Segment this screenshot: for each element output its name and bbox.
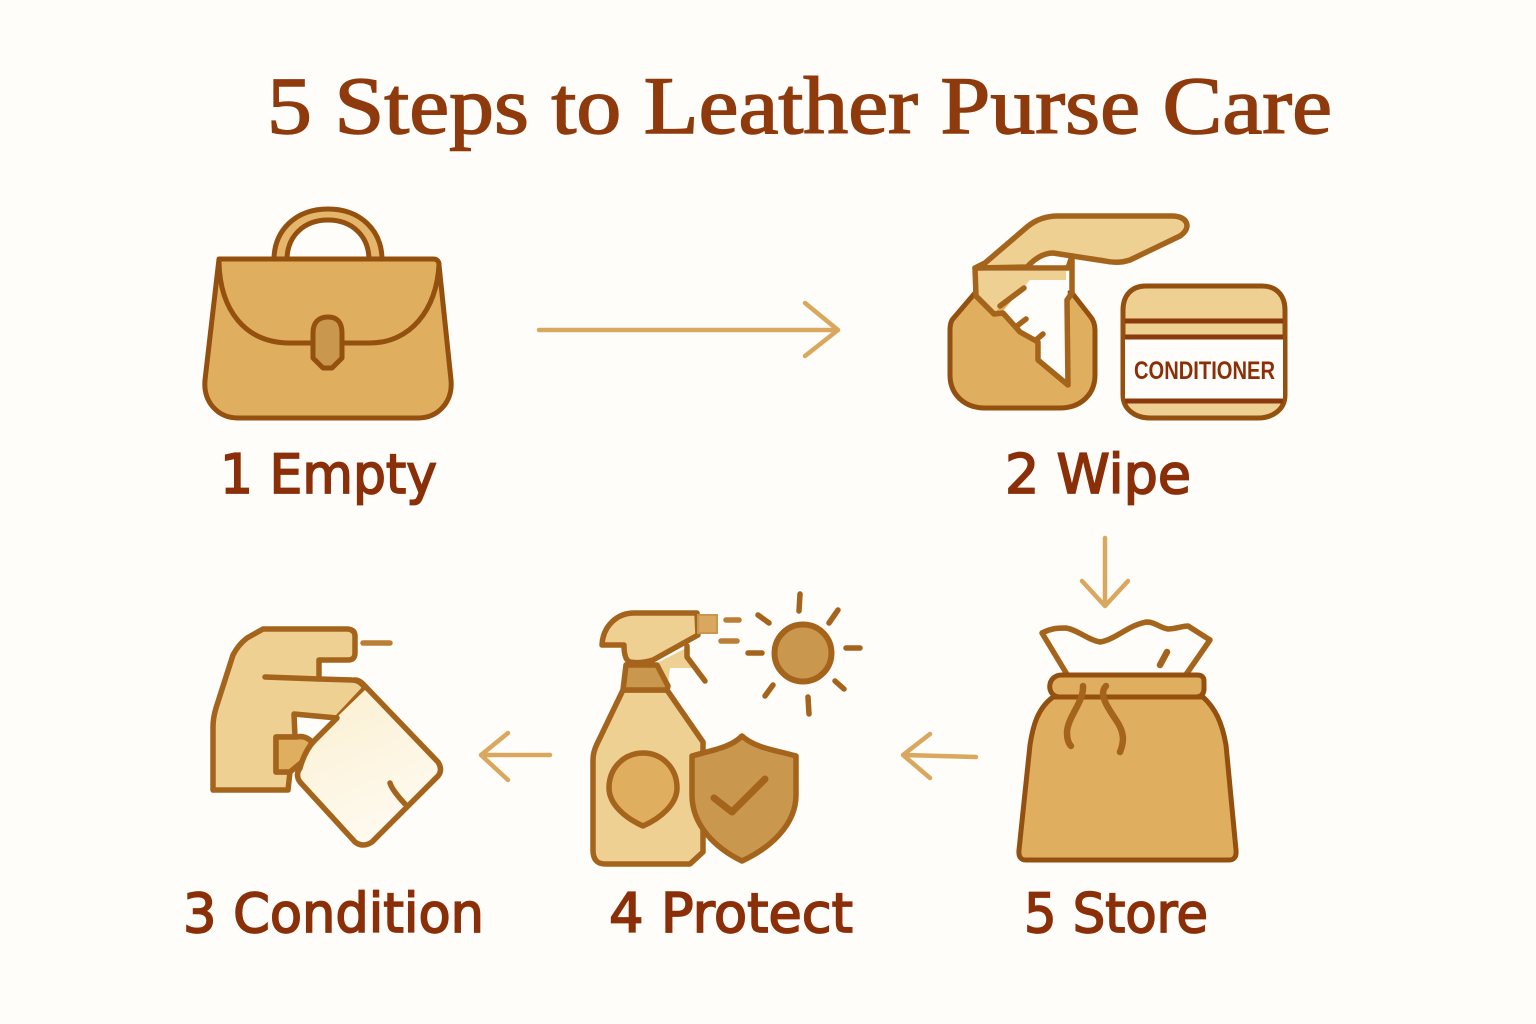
step 5: store (1019, 622, 1236, 945)
icon: hand (213, 629, 390, 790)
label: 5 Store: 5 Store (1024, 882, 1208, 945)
arrow: step 2 to step 5 (1082, 538, 1128, 606)
icon: spray bottle (593, 613, 717, 864)
arrow: step 4 to step 3 (481, 733, 550, 780)
label: 1 Empty: 1 Empty (220, 443, 437, 506)
jar label text: CONDITIONER (1134, 357, 1275, 385)
icon: bottle label (609, 753, 677, 826)
label: 4 Protect: 4 Protect (609, 882, 853, 945)
label: 2 Wipe: 2 Wipe (1005, 443, 1191, 506)
step 1: empty (205, 209, 451, 506)
icon: spray droplets (721, 620, 739, 641)
icon: pouch (950, 293, 1095, 408)
step 2: wipe (950, 216, 1285, 506)
arrow: step 5 to step 4 (903, 734, 976, 778)
icon: cloth (1002, 279, 1068, 384)
icon: conditioner jar (1123, 286, 1285, 418)
icon: handbag (205, 209, 451, 418)
icon: tissue top (1042, 622, 1210, 676)
icon: sun (748, 594, 860, 714)
icon: conditioner cloth (298, 680, 440, 845)
arrow: step 1 to step 2 (539, 303, 838, 356)
title: 5 Steps to Leather Purse Care (267, 60, 1332, 151)
icon: hand (975, 216, 1187, 385)
step 3: condition (183, 629, 484, 945)
step 4: protect (593, 594, 860, 945)
icon: shield with check (692, 736, 796, 861)
icon: drawstring bag (1019, 652, 1236, 860)
label: 3 Condition: 3 Condition (183, 882, 484, 945)
icon: clasp (313, 317, 342, 368)
